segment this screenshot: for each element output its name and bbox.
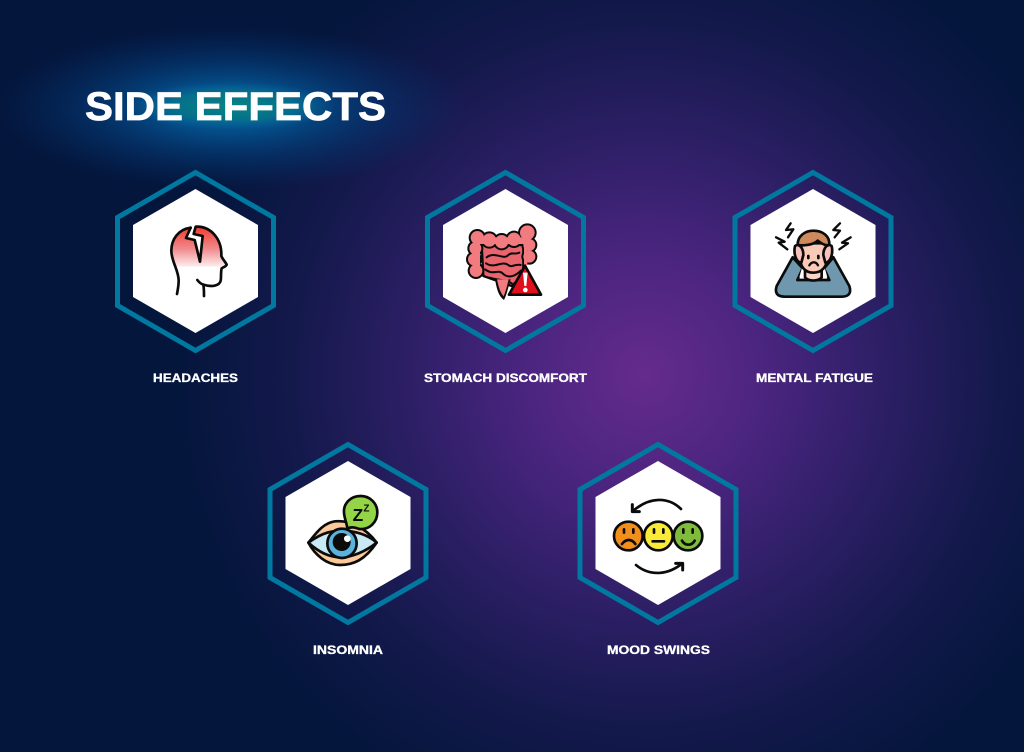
icon: eye with sleep bubble: [308, 496, 377, 565]
hexagon frame: [428, 172, 584, 350]
hexagon frame: [735, 172, 891, 350]
label: headaches: HEADACHES: [153, 371, 238, 385]
label: stomach discomfort: STOMACH DISCOMFORT: [424, 371, 588, 385]
panel: insomnia: [270, 444, 426, 622]
hexagon frame: [580, 444, 736, 622]
label: mental fatigue: MENTAL FATIGUE: [756, 371, 873, 385]
panel: headaches: [118, 172, 274, 350]
icon: man holding head: [776, 223, 851, 297]
icon: eye with sleep bubble: Z: [363, 504, 369, 515]
icon: head with lightning: [171, 227, 227, 296]
panel: mood swings: [580, 444, 736, 622]
label: mood swings: MOOD SWINGS: [607, 643, 710, 657]
icon: intestines with warning triangle: [466, 223, 541, 300]
panel: stomach discomfort: [428, 172, 584, 350]
hexagon frame: [118, 172, 274, 350]
icon: mood faces with cycle arrows: [614, 500, 702, 573]
label: insomnia: INSOMNIA: [313, 643, 383, 657]
icon: eye with sleep bubble: Z: [353, 505, 364, 525]
title: SIDE EFFECTS: [85, 85, 386, 129]
hexagon frame: [270, 444, 426, 622]
panel: mental fatigue: [735, 172, 891, 350]
